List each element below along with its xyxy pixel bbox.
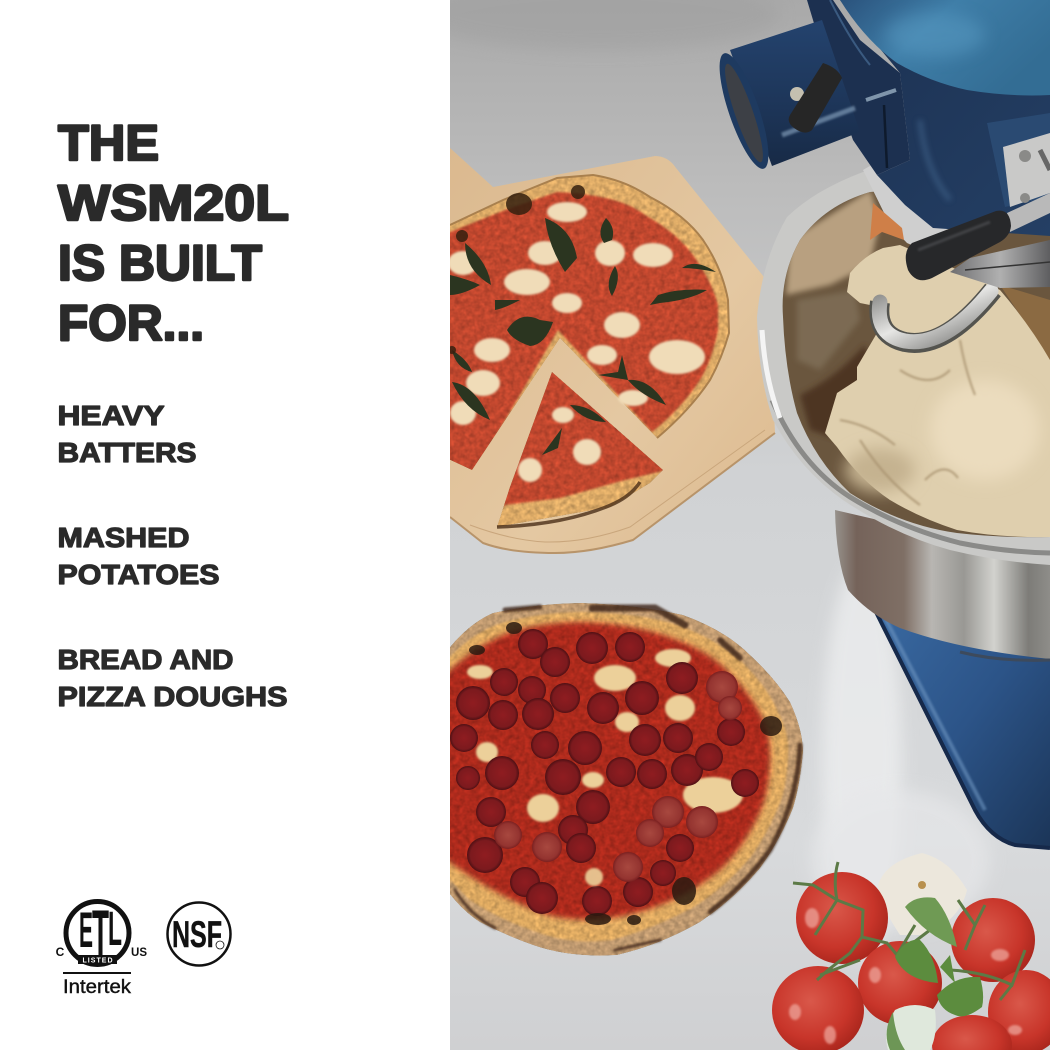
title: IS BUILT: [58, 235, 262, 291]
icon: ETL Intertek certification: [56, 896, 147, 998]
orange clip: [870, 203, 904, 240]
steel counter: [420, 0, 1050, 1050]
crust browning: [450, 175, 729, 438]
icon: NSF certification: [168, 902, 230, 966]
side cylinder: [720, 20, 856, 169]
icon: ETL Intertek certification: C: [56, 945, 65, 959]
garlic clove: [886, 1005, 936, 1050]
charred crust edges: [455, 607, 800, 950]
text: bread and pizza doughs: BREAD AND: [58, 644, 234, 675]
icon: ETL Intertek certification: T: [92, 896, 109, 972]
text: heavy batters: HEAVY: [58, 400, 165, 431]
steel ring under head: [950, 240, 1050, 288]
icon: ETL Intertek certification: L: [108, 903, 122, 956]
vines: [793, 862, 1025, 1000]
basil: [895, 897, 983, 1016]
melted cheese: [467, 649, 743, 822]
icon: NSF certification: NSF: [172, 914, 222, 955]
stand mixer base: [873, 606, 1050, 848]
text: bread and pizza doughs: PIZZA DOUGHS: [58, 681, 288, 712]
dough hook: [879, 290, 993, 343]
icon: ETL Intertek certification: Intertek: [63, 977, 132, 998]
margherita pizza with cut slice: [450, 174, 730, 529]
tomato vine cluster: [772, 872, 1050, 1050]
text: mashed potatoes: POTATOES: [58, 559, 220, 590]
bowl interior: [782, 192, 1050, 538]
blue dome: [840, 0, 1050, 95]
tomatoes, garlic and basil: [772, 853, 1050, 1050]
pale pepperoni slices: [494, 671, 742, 882]
title: THE: [58, 115, 159, 171]
pepperoni slices: [450, 629, 759, 916]
mixer head: [710, 0, 1050, 288]
photo: pizzas and stand mixer on steel counter: [420, 0, 1050, 1050]
lever handle: [906, 193, 1050, 280]
title: [58, 115, 289, 351]
basil leaves: [450, 218, 716, 455]
bowl rim: [757, 172, 1050, 565]
mixing bowl: [757, 170, 1050, 660]
pepperoni pizza: [440, 600, 805, 960]
title: WSM20L: [58, 175, 289, 231]
garlic bulb: [878, 853, 967, 935]
char spots: [448, 185, 585, 354]
dough: [825, 245, 1050, 537]
text: heavy batters: BATTERS: [58, 437, 196, 468]
navy body: [840, 0, 1050, 236]
title: FOR...: [58, 295, 204, 351]
wooden pizza peel: [450, 148, 775, 553]
text: bread and pizza doughs: [58, 644, 288, 712]
speed control plate: [987, 113, 1050, 207]
icon: ETL Intertek certification: US: [131, 945, 147, 959]
slice crust and sauce: [497, 372, 663, 527]
front bracket: [807, 0, 910, 175]
body highlights: [920, 120, 950, 200]
cheese patches: [448, 202, 705, 482]
left text panel background: [0, 0, 450, 1050]
slice burnt crust: [497, 482, 640, 527]
black knob: [789, 63, 842, 133]
main pizza crust and sauce: [450, 176, 728, 470]
text: mashed potatoes: MASHED: [58, 522, 190, 553]
icon: ETL Intertek certification: LISTED: [82, 958, 112, 964]
silver collar: [863, 166, 948, 244]
text: heavy batters: [58, 400, 196, 468]
icon: ETL Intertek certification: E: [79, 902, 93, 958]
bowl exterior: [835, 510, 1050, 659]
text: mashed potatoes: [58, 522, 220, 590]
use list: [58, 400, 288, 712]
